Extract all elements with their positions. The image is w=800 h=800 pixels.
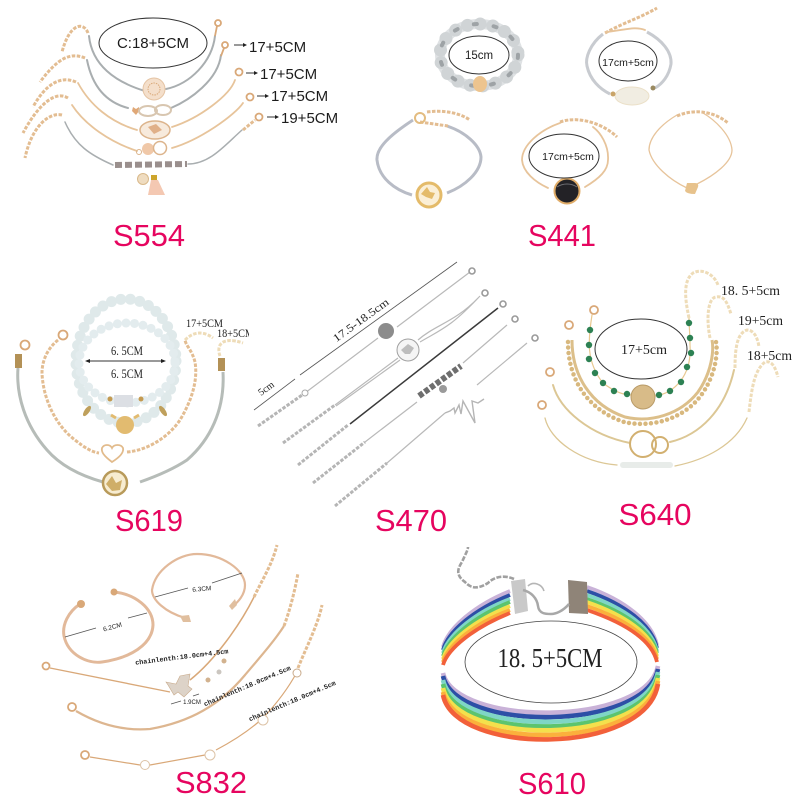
bracelet: bar with double rings xyxy=(546,330,759,457)
dimension arrow with two 6.5CM labels: 6. 5CM xyxy=(111,366,143,381)
chain length label: chainlenth:18.0cm+4.5cm xyxy=(203,665,292,709)
clasp and extender chain xyxy=(458,547,588,614)
bracelet: gold with linked circles xyxy=(23,94,254,155)
bracelet: grey cord with filigree disc xyxy=(62,20,221,100)
dimension: 6.2CM xyxy=(65,613,147,637)
strand: heartbeat charm xyxy=(335,335,538,506)
dimension: 6.3CM xyxy=(155,573,242,597)
size label with arrow: 19+5CM: 19+5CM xyxy=(281,110,338,127)
heading: S619: S619 xyxy=(115,503,183,538)
bracelet: gold chain with white beads xyxy=(538,362,778,468)
bracelet: inner white bead strand with marble xyxy=(79,323,175,407)
heading: S640: S640 xyxy=(618,497,692,532)
rainbow band: back left xyxy=(443,591,510,665)
heading: S441: S441 xyxy=(528,218,596,253)
size label: 18.5+5cm: 18. 5+5cm xyxy=(721,284,780,299)
bracelet: gold chain with heart xyxy=(42,330,213,462)
size label: 18+5CM (clipped): 18+5CM xyxy=(217,328,254,340)
bracelet: marble beads with turtle: 15cm xyxy=(465,50,493,62)
dimension: 5cm: 5cm xyxy=(256,379,277,398)
bracelet: grey cord with infinity charm xyxy=(40,42,228,116)
panel: S470 five-strand set xyxy=(254,262,538,538)
dimension: 17.5-18.5cm: 17.5-18.5cm xyxy=(331,296,392,345)
size label with arrow: 17+5CM: 17+5CM xyxy=(271,88,328,105)
bracelet: marble beads with turtle xyxy=(440,24,518,92)
panel: S640 four-strand set xyxy=(538,271,792,532)
dimension arrow with two 6.5CM labels: 6. 5CM xyxy=(111,343,143,358)
panel: S832 cuff and chain set xyxy=(42,545,337,800)
panel: S554 five-piece bracelet set xyxy=(23,18,338,253)
size label: 17+5CM: 17+5CM xyxy=(186,318,223,330)
dimension: 1.9CM: 1.9CM xyxy=(183,700,201,706)
bracelet: green beads with sunburst disc xyxy=(586,271,718,409)
dimension: 6.3CM: 6.3CM xyxy=(192,585,212,594)
chain bracelet: rope gold xyxy=(68,573,298,729)
heading: S832: S832 xyxy=(175,765,247,800)
panel: S441 five-piece bracelet set xyxy=(377,8,732,253)
chain bracelet: rhinestone butterfly xyxy=(42,545,277,697)
bracelet: grey cord with leaf charm: 17cm+5cm xyxy=(602,57,654,69)
bracelet: gold with heart world charm xyxy=(33,68,242,139)
dimension: 6.2CM: 6.2CM xyxy=(102,622,123,633)
dimension arrow with two 6.5CM labels xyxy=(85,343,166,381)
heading: S554: S554 xyxy=(113,218,185,253)
bracelet: grey cord with world disc xyxy=(15,340,243,495)
chain length label: chainlenth:18.0cm+4.5cm xyxy=(248,680,337,724)
size oval: 18.5+5CM xyxy=(465,621,637,703)
strand: dark beads with heart xyxy=(313,316,518,483)
bracelet: gold chain with black stone xyxy=(522,120,617,204)
rainbow band: back right xyxy=(587,587,657,662)
panel: S610 rainbow woven bracelet xyxy=(443,547,658,800)
size label with arrow: 17+5CM: 17+5CM xyxy=(260,66,317,83)
rainbow band: front xyxy=(443,666,658,739)
strand: grey stone xyxy=(258,268,475,426)
dimension: 17.5-18.5cm xyxy=(300,262,457,375)
bracelet: grey double cord with world charm xyxy=(377,111,481,207)
size oval: C:18+5CM xyxy=(99,18,207,68)
bracelet: gold chain with black stone: 17cm+5cm xyxy=(542,151,594,163)
bracelet: gold coin fringe xyxy=(565,297,731,424)
cuff bangle: left xyxy=(64,588,153,662)
panel: S619 bracelet set xyxy=(15,299,254,538)
size oval: C:18+5CM: C:18+5CM xyxy=(117,35,189,52)
strand: world disc xyxy=(283,290,488,443)
chain bracelet: small rings xyxy=(81,605,322,770)
dimension: 5cm xyxy=(254,379,295,410)
size oval: 17+5cm xyxy=(595,319,687,379)
dimension: 1.9CM xyxy=(171,694,201,706)
size label: 19+5cm: 19+5cm xyxy=(738,314,783,329)
size oval: 18.5+5CM: 18. 5+5CM xyxy=(498,643,602,673)
size label with arrow: 17+5CM: 17+5CM xyxy=(249,39,306,56)
bracelet: outer white bead strand with turtle xyxy=(76,299,176,434)
heading: S470: S470 xyxy=(375,503,447,538)
size label: 18+5cm: 18+5cm xyxy=(747,349,792,364)
cuff bangle: right xyxy=(152,554,245,622)
bracelet: grey beads with tassel xyxy=(25,114,262,195)
strand: black bead chain xyxy=(298,301,506,465)
bracelet: gold chain with heart xyxy=(649,112,732,194)
size oval: 17+5cm: 17+5cm xyxy=(621,343,667,358)
chain length label: chainlenth:18.0cm+4.5cm xyxy=(135,648,229,668)
heading: S610: S610 xyxy=(518,766,586,800)
bracelet: grey cord with leaf charm xyxy=(587,8,671,105)
